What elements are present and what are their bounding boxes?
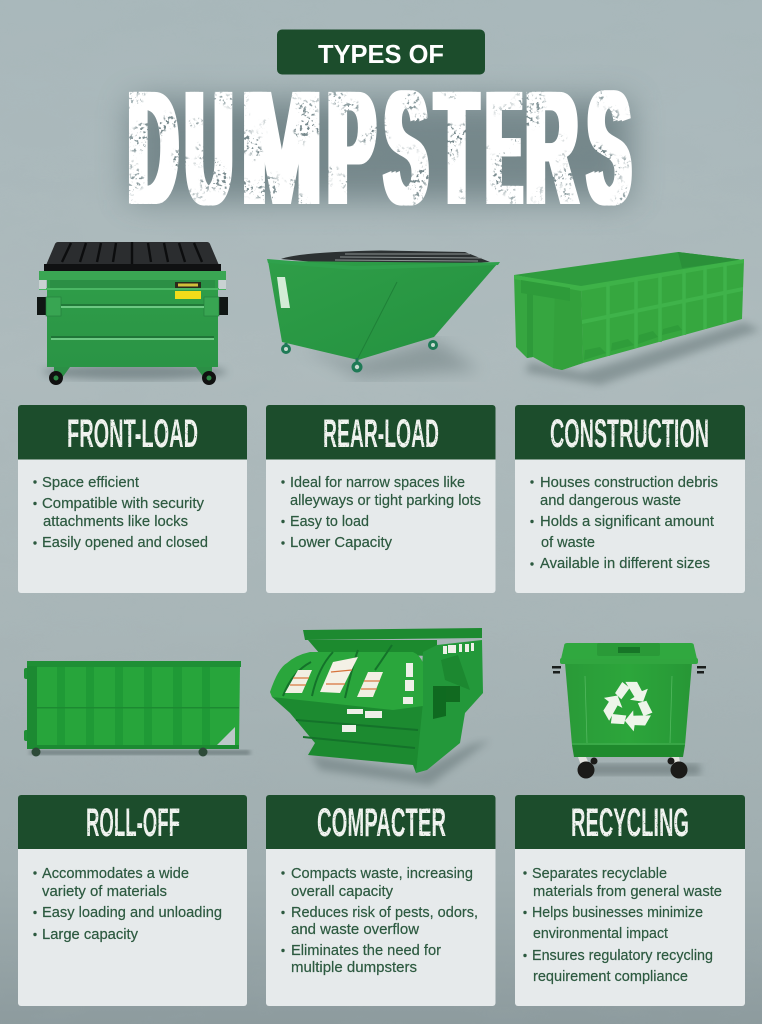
- text: compacter bullets: and waste overflow: [291, 922, 420, 938]
- text: construction bullets: Holds a significant amount: [540, 514, 714, 530]
- heading: compacter: COMPACTER: [317, 801, 446, 845]
- text: rear-load bullets: Lower Capacity: [290, 535, 393, 551]
- title: dumpsters: S: [588, 56, 630, 239]
- image: construction dumpster: [514, 252, 760, 385]
- image: roll-off dumpster: [24, 661, 250, 756]
- heading: compacter: [266, 795, 496, 849]
- text: construction bullets: of waste: [541, 535, 595, 551]
- title: dumpsters: D: [129, 56, 177, 239]
- title: dumpsters: M: [242, 56, 321, 239]
- text: roll-off bullets: Large capacity: [42, 927, 139, 943]
- text: roll-off bullets: [33, 866, 222, 943]
- text: recycling bullets: environmental impact: [533, 926, 668, 942]
- panel: construction: [515, 405, 745, 593]
- heading: front-load: [18, 405, 247, 460]
- text: construction bullets: Available in different sizes: [540, 556, 710, 572]
- title: dumpsters: S: [385, 56, 427, 239]
- text: front-load bullets: Easily opened and closed: [42, 535, 208, 551]
- icon: recycle symbol: [599, 682, 656, 734]
- heading: rear-load: REAR-LOAD: [323, 412, 439, 456]
- text: construction bullets: Houses construction debris: [540, 475, 718, 491]
- text: compacter bullets: multiple dumpsters: [291, 960, 417, 976]
- text: recycling bullets: materials from general waste: [533, 884, 722, 900]
- text: front-load bullets: Compatible with security: [42, 496, 205, 512]
- text: recycling bullets: Ensures regulatory recycling: [532, 948, 713, 964]
- title shadow: [130, 100, 630, 200]
- image: rear-load dumpster: [267, 250, 500, 378]
- image: compacter dumpster: [270, 628, 490, 785]
- title: dumpsters: P: [328, 56, 375, 239]
- panel: rear-load: [266, 405, 496, 593]
- text: roll-off bullets: Easy loading and unloading: [42, 905, 222, 921]
- title: dumpsters: U: [186, 56, 232, 239]
- heading: recycling: [515, 795, 745, 849]
- panel: compacter: [266, 795, 496, 1006]
- title: dumpsters: T: [436, 56, 477, 239]
- heading: roll-off: ROLL-OFF: [86, 801, 180, 845]
- text: front-load bullets: Space efficient: [42, 475, 139, 491]
- image: front-load dumpster: [37, 242, 228, 385]
- text: construction bullets: [530, 475, 718, 572]
- title badge: types of: [277, 30, 485, 74]
- title: dumpsters: [128, 56, 632, 239]
- text: compacter bullets: [281, 866, 478, 976]
- title badge: types of: TYPES OF: [318, 41, 444, 69]
- heading: construction: [515, 405, 745, 460]
- heading: roll-off: [18, 795, 247, 849]
- text: recycling bullets: Helps businesses minimize: [532, 905, 703, 921]
- text: recycling bullets: Separates recyclable: [532, 866, 667, 882]
- text: compacter bullets: Reduces risk of pests, odors,: [291, 905, 478, 921]
- text: rear-load bullets: alleyways or tight parking lots: [290, 493, 481, 509]
- text: front-load bullets: attachments like locks: [43, 514, 188, 530]
- text: roll-off bullets: Accommodates a wide: [42, 866, 189, 882]
- text: rear-load bullets: Easy to load: [290, 514, 369, 530]
- text: compacter bullets: Eliminates the need for: [291, 943, 441, 959]
- panel: recycling: [515, 795, 745, 1006]
- text: rear-load bullets: [281, 475, 481, 551]
- text: compacter bullets: Compacts waste, increasing: [291, 866, 473, 882]
- text: rear-load bullets: Ideal for narrow spaces like: [290, 475, 465, 491]
- text: roll-off bullets: variety of materials: [42, 884, 167, 900]
- text: front-load bullets: [33, 475, 208, 551]
- text: compacter bullets: overall capacity: [291, 884, 394, 900]
- heading: rear-load: [266, 405, 496, 460]
- panel: front-load: [18, 405, 247, 593]
- title: dumpsters: E: [486, 56, 521, 239]
- text: construction bullets: and dangerous waste: [540, 493, 681, 509]
- heading: front-load: FRONT-LOAD: [67, 412, 198, 456]
- title: dumpsters: R: [526, 56, 578, 239]
- image: recycling bin: [552, 643, 706, 778]
- text: recycling bullets: [523, 866, 722, 985]
- panel: roll-off: [18, 795, 247, 1006]
- text: recycling bullets: requirement compliance: [533, 969, 688, 985]
